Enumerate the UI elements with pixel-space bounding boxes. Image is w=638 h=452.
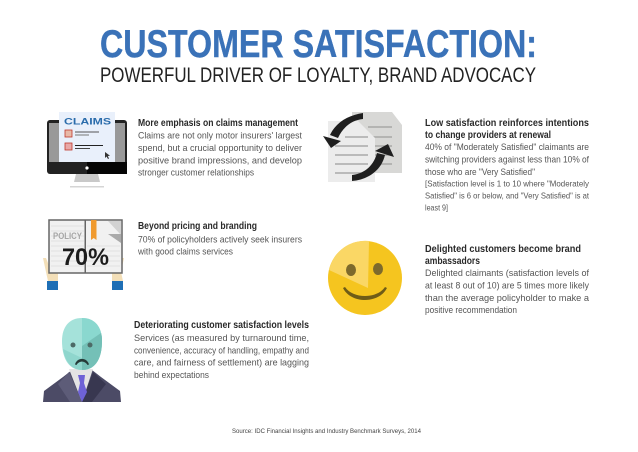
icon: policy book: 70% xyxy=(62,244,109,271)
text: low satisfaction: Satisfied" is 6 or below, and "Very Satisfied" is at xyxy=(425,192,590,200)
icon: smiley face xyxy=(328,241,402,315)
text: beyond pricing: Beyond pricing and branding xyxy=(138,220,257,232)
text: low satisfaction: those who are "Very Satisfied" xyxy=(425,167,535,177)
text: low satisfaction: to change providers at renewal xyxy=(425,129,551,141)
text: deteriorating satisfaction: convenience, accuracy of handling, empathy and xyxy=(134,346,309,356)
icon: documents with cycle arrows xyxy=(323,112,402,182)
text: delighted customers: Delighted customers become brand xyxy=(425,243,581,255)
text: delighted customers xyxy=(425,243,590,315)
icon: policy book xyxy=(43,220,124,290)
text: claims management: stronger customer relationships xyxy=(138,168,254,178)
icon: policy book: POLICY xyxy=(53,231,82,241)
title xyxy=(100,23,537,87)
title: POWERFUL DRIVER OF LOYALTY, BRAND ADVOCACY xyxy=(100,64,536,87)
text: beyond pricing: 70% of policyholders actively seek insurers xyxy=(138,234,302,244)
text: claims management: positive brand impressions, and develop xyxy=(138,156,302,166)
text: claims management: More emphasis on claims management xyxy=(138,117,298,129)
text: claims management xyxy=(138,117,302,178)
text: low satisfaction: 40% of "Moderately Satisfied" claimants are xyxy=(425,142,589,152)
text: beyond pricing xyxy=(137,220,302,256)
text: low satisfaction xyxy=(425,117,590,212)
text: low satisfaction: Low satisfaction reinforces intentions xyxy=(425,117,589,129)
text: deteriorating satisfaction: Services (as measured by turnaround time, xyxy=(134,333,309,343)
text: beyond pricing: with good claims services xyxy=(137,246,233,256)
text: delighted customers: Delighted claimants (satisfaction levels of xyxy=(425,268,589,278)
text: claims management: Claims are not only motor insurers' largest xyxy=(138,130,302,140)
text: delighted customers: at least 8 out of 10) are 5 times more likely xyxy=(425,280,589,290)
text: low satisfaction: least 9] xyxy=(425,204,448,212)
text: delighted customers: than the average policyholder to make a xyxy=(425,293,590,303)
icon: claims monitor: CLAIMS xyxy=(64,116,111,126)
title: CUSTOMER SATISFACTION: xyxy=(100,23,537,66)
text: deteriorating satisfaction xyxy=(134,319,309,380)
text: low satisfaction: switching providers against less than 10% of xyxy=(425,154,589,164)
text: deteriorating satisfaction: behind expectations xyxy=(134,370,209,380)
text: delighted customers: positive recommendation xyxy=(425,305,517,315)
text: claims management: spend, but a crucial opportunity to deliver xyxy=(138,143,302,153)
text: deteriorating satisfaction: Deteriorating customer satisfaction levels xyxy=(134,319,309,331)
icon: claims monitor xyxy=(47,112,127,188)
text: delighted customers: ambassadors xyxy=(425,255,480,267)
text: deteriorating satisfaction: care, and fairness of settlement) are lagging xyxy=(134,358,309,368)
icon: unhappy businessman xyxy=(43,318,121,402)
text: low satisfaction: [Satisfaction level is 1 to 10 where "Moderately xyxy=(425,180,590,188)
source note: Source: IDC Financial Insights and Industry Benchmark Surveys, 2014 xyxy=(232,428,421,435)
